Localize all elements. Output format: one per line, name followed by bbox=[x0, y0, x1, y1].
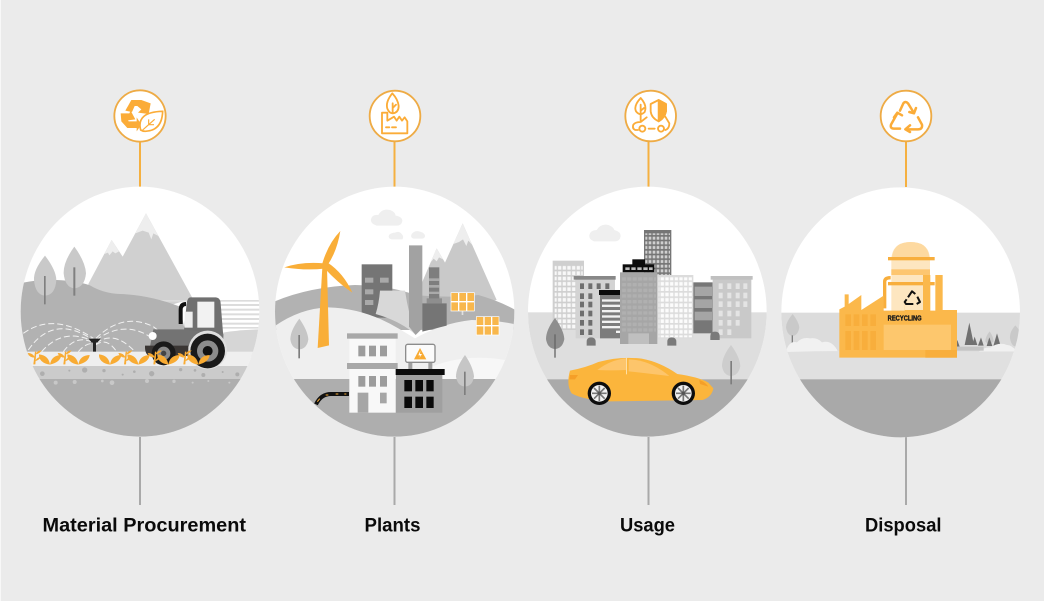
panel: usage scene bbox=[528, 186, 766, 437]
icon: flame over factory bbox=[370, 91, 420, 141]
ground bands bbox=[27, 352, 253, 437]
silo bbox=[888, 242, 935, 312]
central building bbox=[620, 259, 657, 344]
lighter patch bbox=[432, 358, 512, 380]
sign text: RECYCLING bbox=[888, 314, 922, 323]
road bbox=[547, 379, 748, 437]
dark grey building bbox=[396, 369, 445, 413]
hills bbox=[17, 280, 190, 357]
foreground ground bbox=[276, 307, 514, 379]
tree right bbox=[64, 247, 86, 296]
road bbox=[294, 379, 496, 437]
cooling tower bbox=[376, 291, 416, 335]
solar panel 1 bbox=[451, 293, 474, 315]
solar panel 2 bbox=[476, 317, 499, 335]
building left pale bbox=[553, 261, 584, 330]
connector: disposal bottom bbox=[905, 437, 907, 505]
far right building bbox=[711, 276, 753, 338]
soil stones bbox=[40, 367, 239, 377]
stripes on the horizon bbox=[160, 300, 267, 329]
warning sign bbox=[406, 344, 435, 369]
shrubs bbox=[587, 332, 720, 346]
pipeline bbox=[316, 394, 349, 404]
conifers bbox=[955, 323, 1001, 347]
recycling symbol bbox=[905, 291, 920, 304]
factory building bbox=[839, 275, 957, 358]
wind turbine bbox=[284, 231, 352, 348]
mountains bbox=[422, 224, 496, 300]
right tree bbox=[1010, 325, 1022, 347]
pipe bbox=[885, 278, 891, 308]
right pale building bbox=[657, 275, 693, 338]
white office building bbox=[347, 333, 398, 413]
connector: material procurement bottom bbox=[139, 437, 141, 505]
road bbox=[775, 379, 1029, 439]
label: Disposal: Disposal bbox=[865, 514, 942, 536]
connector: plants bottom bbox=[394, 437, 396, 505]
left tree bbox=[786, 314, 799, 343]
shrubs bbox=[785, 338, 1017, 353]
tree right bbox=[722, 345, 740, 384]
background land bbox=[775, 313, 1029, 353]
striped tower bbox=[427, 267, 442, 303]
tree left bbox=[34, 256, 56, 304]
chimney bbox=[409, 245, 422, 335]
panel: disposal scene bbox=[772, 180, 1032, 445]
clouds bbox=[371, 210, 425, 239]
dark slatted building bbox=[693, 282, 713, 333]
tree right bbox=[456, 355, 474, 395]
tractor bbox=[145, 297, 227, 369]
mountains bbox=[88, 213, 193, 313]
dark block bbox=[362, 264, 392, 318]
foreground land bbox=[775, 351, 1029, 380]
dark factory block bbox=[422, 303, 447, 332]
connector: usage top bbox=[648, 142, 650, 187]
building with dark windows bbox=[574, 276, 616, 338]
sprinkler head bbox=[89, 339, 101, 352]
hill band bbox=[272, 285, 518, 330]
icon: leaf, shield and car bbox=[625, 91, 676, 141]
connector: material procurement top bbox=[139, 142, 141, 187]
tree left bbox=[290, 319, 308, 358]
wheel front bbox=[672, 382, 695, 405]
crops bbox=[28, 350, 210, 365]
cloud bbox=[589, 225, 621, 241]
panel: material procurement scene bbox=[20, 186, 260, 437]
pale trees bbox=[985, 331, 994, 344]
right field bbox=[223, 330, 258, 352]
tower back bbox=[644, 230, 671, 275]
label: Plants: Plants bbox=[364, 514, 421, 536]
ground bbox=[523, 312, 777, 380]
wheel rear bbox=[588, 382, 611, 405]
icon: recycling triangle bbox=[881, 91, 931, 141]
label: Material Procurement: Material Procurement bbox=[42, 514, 247, 536]
car bbox=[568, 358, 713, 405]
connector: usage bottom bbox=[648, 437, 650, 505]
connector: plants top bbox=[394, 142, 396, 187]
panel: plants scene bbox=[275, 186, 514, 437]
tree left bbox=[546, 318, 564, 358]
icon: recycling with leaf bbox=[114, 90, 166, 142]
label: Usage: Usage bbox=[620, 514, 675, 536]
black-topped building bbox=[599, 290, 620, 338]
sprinkler spray bbox=[23, 321, 173, 352]
connector: disposal top bbox=[905, 142, 907, 187]
